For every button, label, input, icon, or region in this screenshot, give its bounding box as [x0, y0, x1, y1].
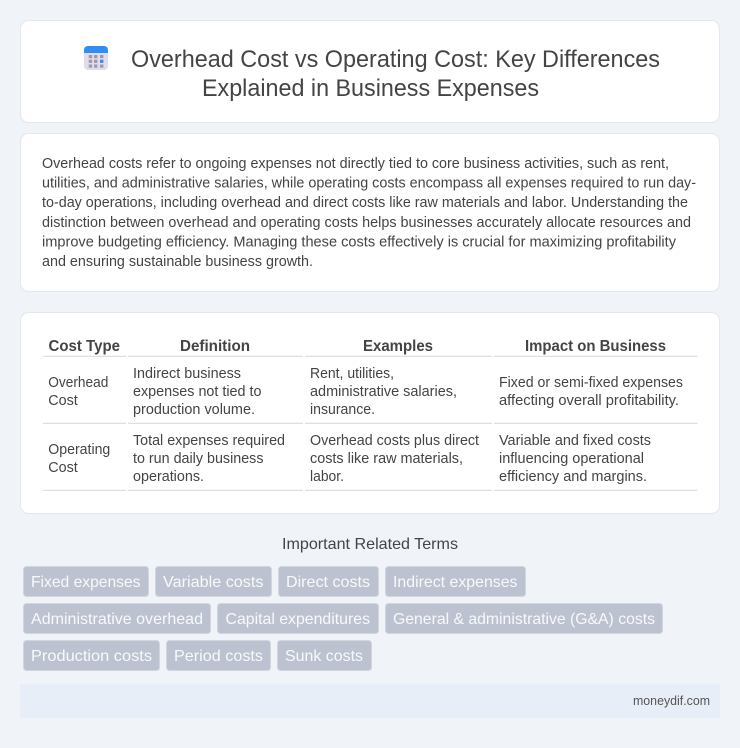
table row: overhead cost: Overhead	[48, 375, 108, 391]
tag group: related terms	[24, 566, 662, 670]
text block: description: distinction between overhead and operating costs helps businesses accurately allocate resources and	[42, 215, 691, 231]
table row: operating cost: operations.	[133, 469, 204, 485]
table row: overhead cost: affecting overall profitability.	[499, 393, 679, 409]
tag: general and administrative costs	[386, 604, 662, 634]
table row: overhead cost: Indirect business	[133, 366, 241, 382]
table row: operating cost: Total expenses required	[133, 433, 285, 449]
title: Explained in Business Expenses	[202, 75, 539, 102]
tag: general and administrative costs: General & administrative (G&A) costs	[393, 611, 655, 628]
table header	[48, 338, 666, 355]
table row: operating cost: Operating	[48, 442, 110, 458]
panel: intro paragraph	[20, 134, 720, 292]
table row: overhead cost: administrative salaries,	[310, 384, 457, 400]
tag: direct costs	[278, 566, 378, 596]
footer band	[20, 684, 720, 718]
tag: sunk costs: Sunk costs	[285, 648, 363, 665]
table row: overhead cost: insurance.	[310, 402, 375, 418]
table row: overhead cost: expenses not tied to	[133, 384, 262, 400]
panel: comparison table	[20, 312, 720, 514]
table row: overhead cost: Cost	[48, 393, 78, 409]
title	[131, 46, 660, 102]
tag: administrative overhead	[24, 604, 210, 634]
table row: overhead cost: Rent, utilities,	[310, 366, 394, 382]
footer source text: moneydif.com	[633, 693, 710, 708]
table row: overhead cost	[48, 366, 683, 418]
table row: operating cost: Variable and fixed costs	[499, 433, 651, 449]
text block: description: Overhead costs refer to ongoing expenses not directly tied to core business activities, such as rent,	[42, 156, 669, 172]
heading: related terms: Important Related Terms	[282, 536, 458, 553]
tag: sunk costs	[278, 640, 372, 670]
table row: operating cost	[48, 433, 651, 485]
tag: period costs	[166, 640, 270, 670]
text block: description: and ensuring sustainable business growth.	[42, 254, 313, 270]
tag: fixed expenses: Fixed expenses	[31, 574, 140, 591]
table header: Impact on Business	[525, 338, 666, 355]
text block: description	[42, 156, 696, 270]
table header: Examples	[363, 338, 433, 355]
table row: operating cost: influencing operational	[499, 451, 644, 467]
table row: operating cost: efficiency and margins.	[499, 469, 647, 485]
text block: description: improve budgeting efficiency. Managing these costs effectively is crucial for maximizing profitability	[42, 234, 677, 250]
table row: overhead cost: Fixed or semi-fixed expenses	[499, 375, 683, 391]
text block: description: utilities, and administrative salaries, while operating costs encompass all expenses required to run day-	[42, 176, 696, 192]
tag: fixed expenses	[24, 566, 148, 596]
table header: Definition	[180, 338, 250, 355]
table header: Cost Type	[48, 338, 120, 355]
tag: direct costs: Direct costs	[286, 574, 370, 591]
table row: operating cost: costs like raw materials,	[310, 451, 463, 467]
tag: production costs	[24, 640, 160, 670]
tag: period costs: Period costs	[174, 648, 263, 665]
tag: capital expenditures: Capital expenditures	[226, 611, 370, 628]
table row: operating cost: labor.	[310, 469, 344, 485]
panel: title card	[20, 20, 720, 122]
tag: variable costs: Variable costs	[163, 574, 264, 591]
icon: calendar	[84, 46, 108, 70]
tag: indirect expenses: Indirect expenses	[393, 574, 518, 591]
text block: description: to-day operations, including overhead and direct costs like raw materials and labor. Understanding the	[42, 195, 688, 211]
title: Overhead Cost vs Operating Cost: Key Differences	[131, 46, 660, 73]
tag: variable costs	[156, 566, 272, 596]
table row: operating cost: Overhead costs plus direct	[310, 433, 479, 449]
tag: production costs: Production costs	[31, 648, 152, 665]
table row: overhead cost: production volume.	[133, 402, 255, 418]
tag: capital expenditures	[218, 604, 378, 634]
tag: administrative overhead: Administrative overhead	[31, 611, 203, 628]
table row: operating cost: Cost	[48, 460, 78, 476]
tag: indirect expenses	[386, 566, 526, 596]
table row: operating cost: to run daily business	[133, 451, 264, 467]
